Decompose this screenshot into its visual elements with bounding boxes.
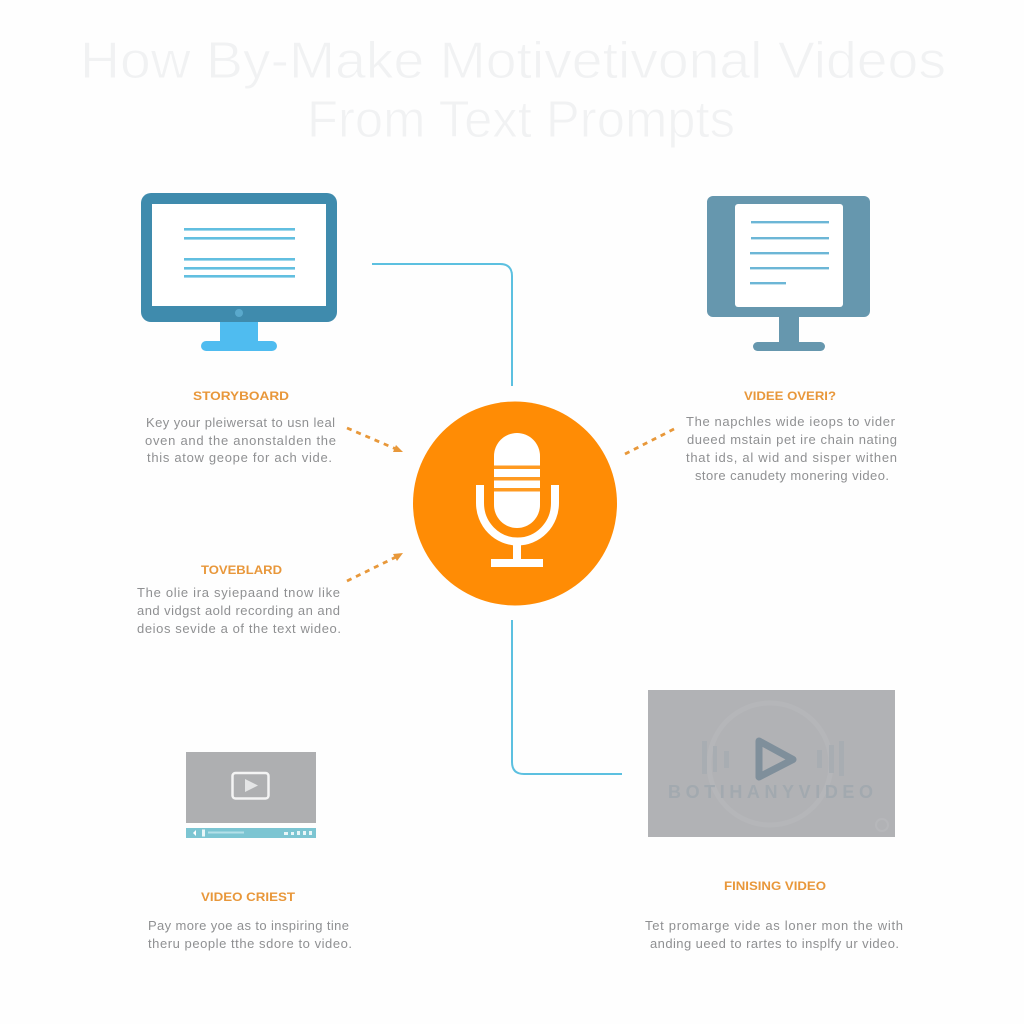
- text block: toveblard: The olie ira syiepaand tnow like: [137, 585, 340, 600]
- arrow: top connector: [372, 264, 512, 386]
- text block: storyboard: STORYBOARD: [193, 389, 289, 403]
- text block: video criest: theru people tthe sdore to video.: [148, 936, 352, 951]
- text block: storyboard: [145, 389, 336, 465]
- arrow: toveblard to microphone: [347, 553, 403, 581]
- text block: storyboard: Key your pleiwersat to usn leal: [146, 415, 335, 430]
- text block: toveblard: TOVEBLARD: [201, 563, 282, 577]
- title: [80, 32, 946, 149]
- text block: video criest: [148, 890, 352, 951]
- text block: video overview: dueed mstain pet ire chain nating: [687, 432, 897, 447]
- text block: video overview: VIDEE OVERI?: [744, 389, 836, 403]
- icon: central microphone: [413, 402, 617, 606]
- text block: toveblard: and vidgst aold recording an and: [137, 603, 340, 618]
- text block: finising video: FINISING VIDEO: [724, 879, 826, 893]
- video thumbnail: small player: [186, 752, 316, 838]
- icon: storyboard monitor: [141, 193, 337, 351]
- text block: storyboard: this atow geope for ach vide.: [147, 450, 332, 465]
- video thumbnail: finished video: BOTIHANYVIDEO: [668, 782, 873, 802]
- title: How By-Make Motivetivonal Videos: [80, 32, 946, 90]
- text block: video criest: VIDEO CRIEST: [201, 890, 296, 904]
- text block: finising video: [645, 879, 903, 951]
- title: From Text Prompts: [307, 91, 735, 149]
- text block: storyboard: oven and the anonstalden the: [145, 433, 336, 448]
- arrow: bottom connector: [512, 620, 622, 774]
- text block: video criest: Pay more yoe as to inspiring tine: [148, 918, 349, 933]
- text block: video overview: [686, 389, 897, 483]
- icon: document monitor: [707, 196, 870, 351]
- text block: video overview: that ids, al wid and sisper withen: [686, 450, 897, 465]
- text block: video overview: The napchles wide ieops to vider: [686, 414, 896, 429]
- text block: finising video: anding ueed to rartes to insplfy ur video.: [650, 936, 899, 951]
- text block: video overview: store canudety monering video.: [695, 468, 889, 483]
- text block: toveblard: deios sevide a of the text wideo.: [137, 621, 341, 636]
- video thumbnail: finished video: [648, 690, 895, 837]
- arrow: microphone to video overview: [625, 427, 678, 454]
- text block: toveblard: [137, 563, 341, 636]
- arrow: storyboard to microphone: [347, 428, 403, 452]
- text block: finising video: Tet promarge vide as loner mon the with: [645, 918, 903, 933]
